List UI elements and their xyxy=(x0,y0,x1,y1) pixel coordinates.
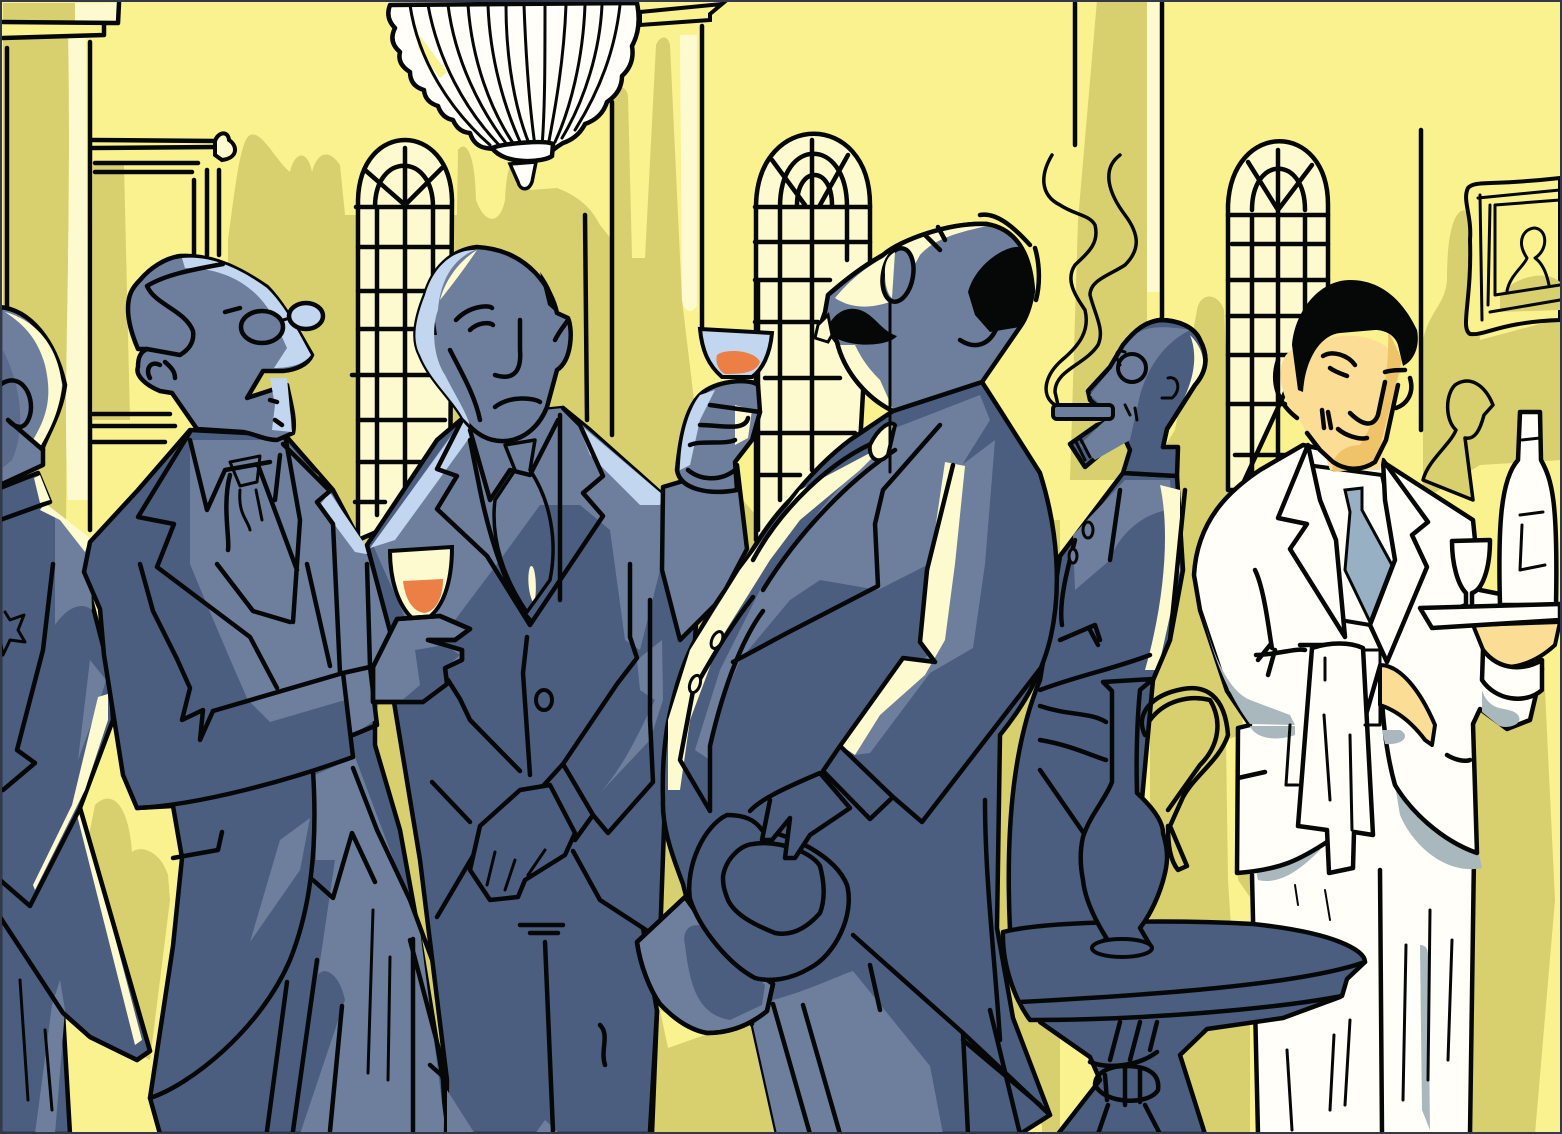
cuff xyxy=(543,764,593,840)
portly man hand xyxy=(750,773,850,860)
guest two xyxy=(367,247,700,1134)
moustache xyxy=(825,309,897,345)
guest one hand and glass xyxy=(373,547,470,702)
window right xyxy=(1228,141,1328,490)
head highlight xyxy=(182,258,311,368)
hand xyxy=(373,616,470,702)
coat xyxy=(367,408,700,1134)
cream chest highlight xyxy=(668,445,885,790)
brim xyxy=(689,815,849,980)
guest two hands xyxy=(470,764,593,900)
tray xyxy=(1420,604,1560,628)
crown xyxy=(637,897,773,1033)
tabletop xyxy=(1003,922,1365,1020)
cravat xyxy=(494,440,553,612)
forehead highlight xyxy=(835,226,987,307)
window centre xyxy=(755,134,870,540)
picture frame left xyxy=(93,133,235,442)
top hat xyxy=(637,815,849,1033)
lapels and lines xyxy=(432,408,657,1131)
hand xyxy=(470,785,575,900)
monocle xyxy=(879,246,917,304)
wine bottle xyxy=(1499,412,1556,605)
cigar xyxy=(1053,405,1113,419)
waistcoat highlight xyxy=(528,566,536,604)
cravat knot xyxy=(230,456,262,530)
raised glass xyxy=(700,329,772,377)
column centre capital xyxy=(640,4,722,25)
left column xyxy=(3,3,119,530)
left lapel xyxy=(1278,445,1345,637)
sleeve line xyxy=(137,667,377,808)
coat midtones xyxy=(373,408,663,650)
raised arm xyxy=(662,465,747,640)
guest one xyxy=(84,256,467,1134)
necktie xyxy=(1345,488,1392,622)
pince-nez xyxy=(241,311,283,343)
left ear xyxy=(1281,348,1310,420)
head xyxy=(128,256,312,440)
button xyxy=(536,690,552,710)
waiter neck shadow xyxy=(1300,360,1400,470)
pedestal xyxy=(1040,997,1340,1134)
guest body xyxy=(0,503,150,1134)
coat midtones xyxy=(190,440,392,735)
raised hand xyxy=(677,381,760,492)
chandelier xyxy=(388,3,639,189)
smoking officer xyxy=(1009,320,1205,930)
face xyxy=(1297,336,1402,469)
officer body xyxy=(1009,473,1183,930)
head xyxy=(415,247,571,441)
guest head xyxy=(0,307,65,485)
shoulder highlight xyxy=(283,444,372,555)
right lapel xyxy=(1370,460,1428,662)
guest collar xyxy=(0,473,50,520)
far-left guest xyxy=(0,307,150,1134)
hair xyxy=(968,247,1031,332)
towel back strip xyxy=(1286,650,1380,830)
waiter xyxy=(1194,280,1560,1134)
window left xyxy=(352,140,452,540)
shoulder highlights xyxy=(370,420,475,548)
cuff xyxy=(1482,650,1542,699)
cream sleeve highlight xyxy=(840,462,965,755)
officer head xyxy=(1070,320,1205,476)
column right lines xyxy=(1075,3,1421,430)
lapels and folds xyxy=(138,432,467,1134)
coat midtones xyxy=(695,395,990,760)
column centre lines xyxy=(585,26,702,435)
wine xyxy=(403,579,443,613)
waiter hand under tray xyxy=(1473,622,1560,667)
shirt xyxy=(1307,465,1400,625)
coat xyxy=(84,430,446,1134)
head xyxy=(817,224,1033,411)
hand on hip xyxy=(1380,665,1435,745)
wine glass on tray xyxy=(1452,540,1490,608)
jug xyxy=(1081,679,1167,945)
inner band xyxy=(723,843,824,934)
hair xyxy=(1292,280,1418,392)
background waiter silhouette xyxy=(1423,381,1493,500)
coat lines xyxy=(680,425,1050,1134)
trousers xyxy=(1252,640,1474,1134)
wine glass xyxy=(390,547,452,628)
tail line xyxy=(150,771,314,1098)
coat xyxy=(663,382,1057,1134)
jug handle xyxy=(1142,688,1228,870)
white jacket xyxy=(1194,445,1542,873)
picture frame right xyxy=(1466,178,1560,334)
portly man with monocle xyxy=(663,215,1057,1134)
collar bow xyxy=(870,424,895,460)
towel xyxy=(1298,644,1373,873)
smoke xyxy=(1044,155,1136,405)
table and jug xyxy=(1003,679,1365,1134)
